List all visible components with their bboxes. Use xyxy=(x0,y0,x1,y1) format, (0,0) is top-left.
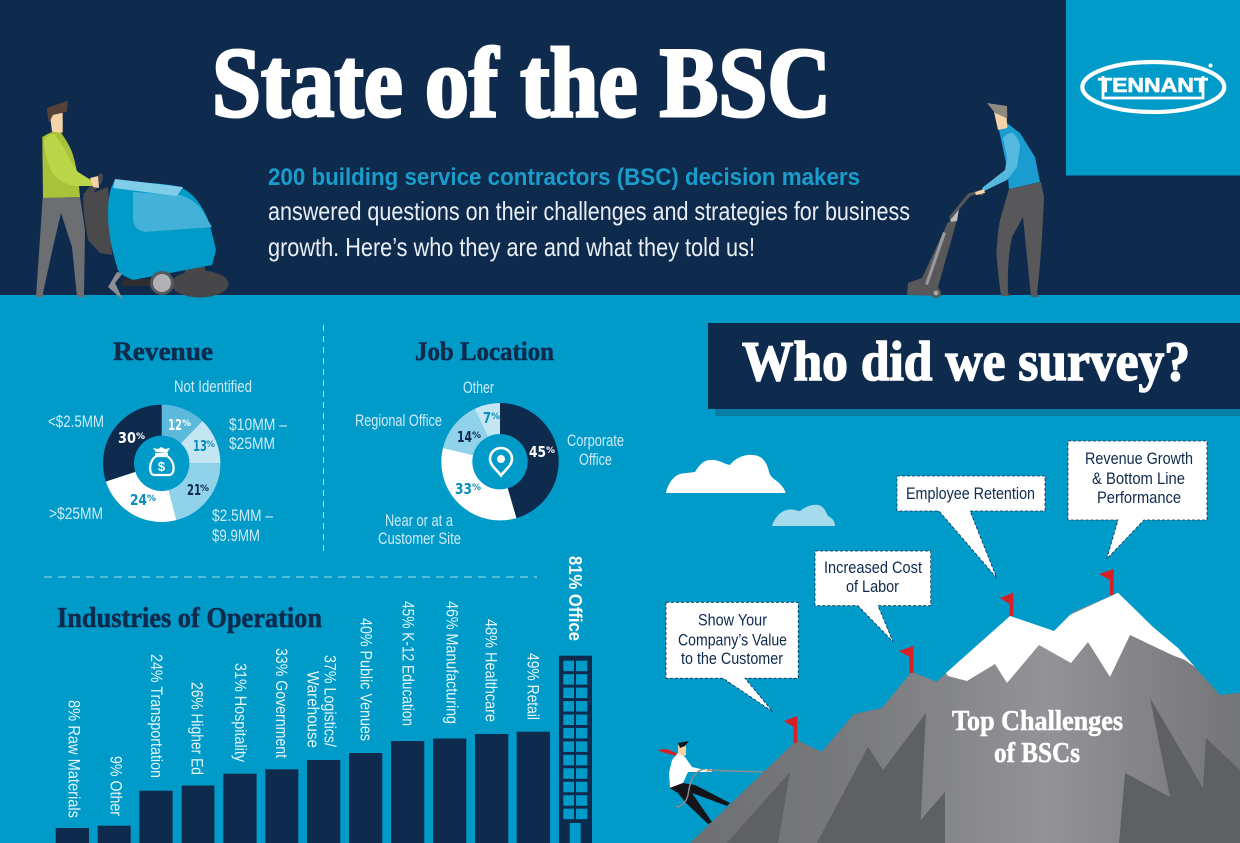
callout: Revenue Growth & Bottom Line Performance xyxy=(1068,441,1207,559)
illustration: worker with vacuum xyxy=(907,103,1044,298)
cloud small xyxy=(772,505,835,526)
heading: Top Challenges of BSCs: Top Challenges xyxy=(952,706,1123,737)
bar chart: industries: 33% Government xyxy=(272,648,291,758)
donut chart: Revenue: % xyxy=(182,419,191,429)
cloud large xyxy=(666,455,786,493)
job location labels: Regional Office xyxy=(355,411,442,430)
bar chart: industries: 46% Manufacturing xyxy=(442,601,462,724)
icon: money bag: $ xyxy=(158,459,166,474)
callout: Revenue Growth & Bottom Line Performance: & Bottom Line xyxy=(1092,469,1185,488)
job location labels: Other xyxy=(463,378,494,397)
building: 81% Office: 81% Office xyxy=(565,556,585,641)
donut chart: Job Location xyxy=(455,409,555,505)
icon: money bag xyxy=(150,447,174,475)
callout: Increased Cost of Labor: of Labor xyxy=(846,577,899,596)
heading: Industries of Operation: Industries of Operation xyxy=(57,603,322,634)
donut chart: Revenue: 13 xyxy=(193,437,207,455)
dashed divider horizontal xyxy=(44,576,537,578)
revenue labels: <$2.5MM xyxy=(48,412,104,431)
icon: location pin xyxy=(490,448,512,476)
banner: Who did we survey?: Who did we survey? xyxy=(742,331,1190,393)
bar chart: industries: 26% Higher Ed xyxy=(188,682,206,775)
flag 3 xyxy=(1000,593,1013,616)
bar chart: industries: 45% K-12 Education xyxy=(398,601,418,726)
donut chart: Revenue: 24 xyxy=(130,491,147,509)
bar chart: industries xyxy=(56,601,550,843)
bar chart: industries: 31% Hospitality xyxy=(231,663,250,762)
logo panel xyxy=(1066,0,1240,176)
bar chart: industries: 9% Other xyxy=(106,756,126,816)
donut chart: Job Location: % xyxy=(491,412,500,422)
building: 81% Office xyxy=(559,556,592,843)
intro text xyxy=(268,164,910,262)
revenue labels: >$25MM xyxy=(49,504,103,523)
intro text: 200 building service contractors (BSC) decision makers xyxy=(268,164,860,191)
callout: Increased Cost of Labor xyxy=(815,551,931,642)
callout: Revenue Growth & Bottom Line Performance: Revenue Growth xyxy=(1085,449,1193,468)
header band xyxy=(0,0,1240,295)
job location labels: Near or at a xyxy=(385,511,453,530)
mountain range xyxy=(690,593,1240,843)
heading: Job Location: Job Location xyxy=(415,337,555,366)
donut chart: Revenue: % xyxy=(136,432,145,442)
heading: Top Challenges of BSCs xyxy=(952,706,1123,769)
dashed divider vertical xyxy=(322,325,324,552)
callout: Show Your Company's Value xyxy=(666,602,798,712)
logo: Tennant: TENNANT xyxy=(1098,75,1208,97)
intro text: answered questions on their challenges and strategies for business xyxy=(268,196,910,226)
donut chart: Job Location: % xyxy=(472,483,481,493)
snow caps xyxy=(946,593,1195,683)
donut chart: Revenue: % xyxy=(147,494,156,504)
intro text: growth. Here’s who they are and what they told us! xyxy=(268,232,755,262)
revenue labels: Not Identified xyxy=(174,377,252,396)
donut chart: Revenue xyxy=(118,416,215,509)
donut chart: Job Location: 33 xyxy=(455,480,472,498)
donut chart: Revenue: % xyxy=(200,484,209,494)
bar chart: industries: 40% Public Venues xyxy=(356,618,376,741)
bar chart: industries: 8% Raw Materials xyxy=(64,700,84,818)
banner: Who did we survey? xyxy=(708,323,1240,416)
bar chart: industries: Warehouse xyxy=(304,671,322,748)
heading: Top Challenges of BSCs: of BSCs xyxy=(994,738,1080,769)
callout: Show Your Company's Value: Company’s Value xyxy=(678,630,787,650)
bar chart: industries: 24% Transportation xyxy=(147,654,166,778)
illustration: climbing businessman xyxy=(657,741,763,824)
bar chart: industries: 48% Healthcare xyxy=(482,619,500,722)
donut chart: Job Location: % xyxy=(472,431,481,441)
bar chart: industries: 49% Retail xyxy=(524,653,542,720)
donut chart: Job Location: 14 xyxy=(457,428,472,446)
callout: Show Your Company's Value: Show Your xyxy=(698,610,767,630)
donut chart: Job Location: 7 xyxy=(483,409,491,427)
revenue labels: $9.9MM xyxy=(212,526,260,545)
callout: Revenue Growth & Bottom Line Performance: Performance xyxy=(1097,488,1181,507)
illustration: worker with floor scrubber xyxy=(36,101,228,300)
revenue labels: $25MM xyxy=(229,434,275,453)
job location labels: Corporate xyxy=(567,431,624,450)
revenue labels: $10MM – xyxy=(229,415,287,434)
callout: Employee Retention xyxy=(897,476,1045,578)
bar chart: industries: 37% Logistics/ xyxy=(320,655,340,747)
callout: Increased Cost of Labor: Increased Cost xyxy=(824,558,922,577)
donut chart: Revenue: 12 xyxy=(168,416,182,434)
revenue labels xyxy=(48,377,287,545)
job location labels xyxy=(355,378,624,548)
logo: Tennant xyxy=(1082,62,1224,112)
revenue labels: $2.5MM – xyxy=(212,506,273,525)
flag 1 xyxy=(784,716,797,743)
callout: Show Your Company's Value: to the Customer xyxy=(681,649,783,668)
flag 2 xyxy=(899,646,913,673)
donut chart: Job Location: 45 xyxy=(529,443,546,461)
callout: Employee Retention: Employee Retention xyxy=(906,484,1035,503)
job location labels: Customer Site xyxy=(378,529,461,548)
heading: Revenue: Revenue xyxy=(113,337,213,366)
job location labels: Office xyxy=(579,450,612,469)
title: State of the BSC xyxy=(212,27,831,138)
flag 4 xyxy=(1099,569,1114,595)
donut chart: Job Location: % xyxy=(546,446,555,456)
donut chart: Revenue: 30 xyxy=(118,429,136,447)
donut chart: Revenue: 21 xyxy=(187,481,201,499)
donut chart: Revenue: % xyxy=(206,440,215,450)
